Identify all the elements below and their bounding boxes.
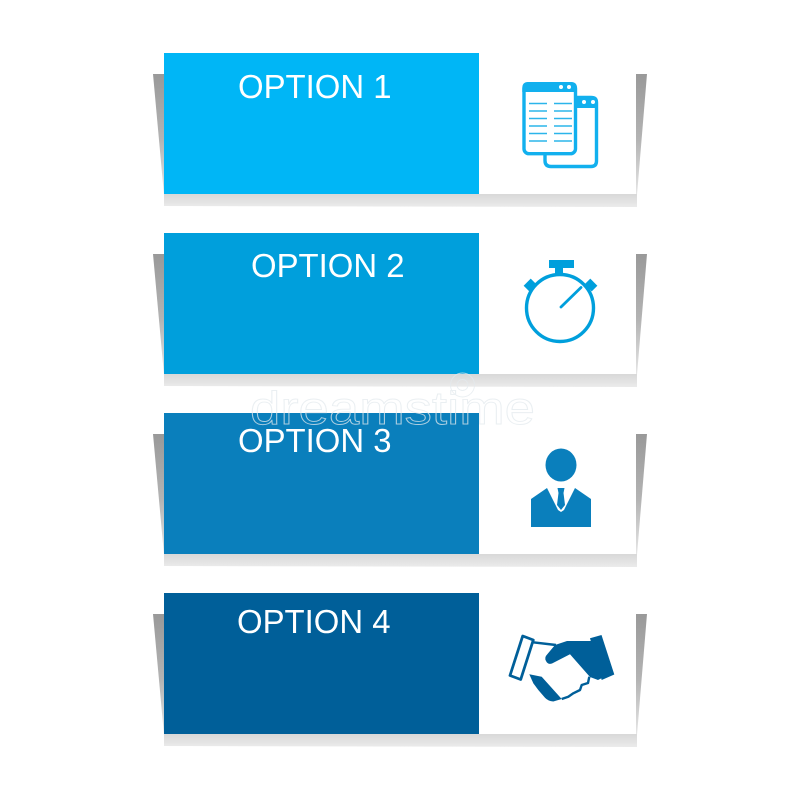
- icon: businessman: [531, 448, 591, 527]
- icon: handshake: [510, 635, 614, 702]
- panel: option 4: [153, 593, 647, 747]
- heading: option 4: OPTION 4: [237, 603, 391, 640]
- panel: option 2: [153, 233, 647, 387]
- heading: option 3: OPTION 3: [238, 422, 392, 459]
- panel: option 3: [153, 413, 647, 567]
- heading: option 1: OPTION 1: [238, 68, 392, 105]
- panel: option 1: [153, 53, 647, 207]
- icon: documents: [522, 82, 598, 166]
- heading: option 2: OPTION 2: [251, 247, 405, 284]
- icon: stopwatch: [524, 260, 597, 342]
- watermark: dreamstime: [250, 382, 535, 434]
